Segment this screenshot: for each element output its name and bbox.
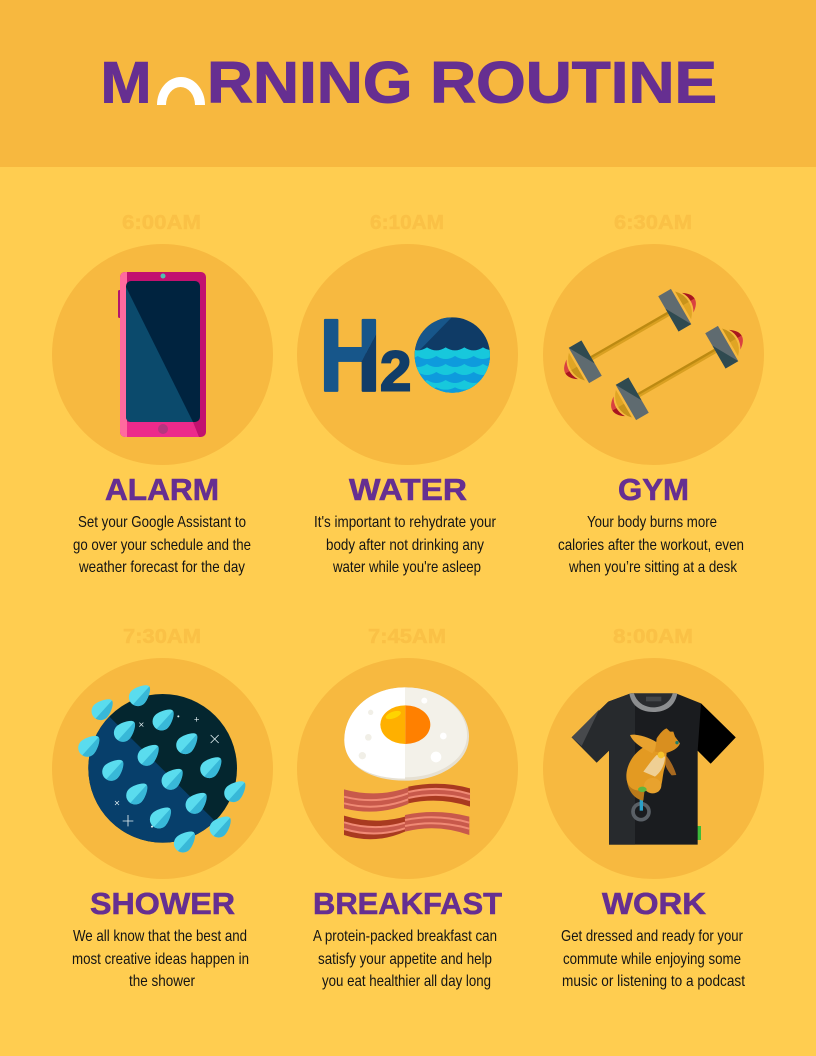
panel: gym: 6:30AM bbox=[614, 212, 692, 234]
heading: WORK bbox=[602, 887, 706, 921]
heading: WATER bbox=[349, 473, 467, 507]
description: music or listening to a podcast bbox=[562, 973, 745, 990]
panel: shower bbox=[52, 626, 273, 990]
icon: shower drops bbox=[78, 685, 246, 852]
title: RNING ROUTINE bbox=[207, 50, 717, 116]
panel: gym bbox=[543, 212, 764, 576]
fried egg bbox=[344, 687, 469, 781]
description: We all know that the best and bbox=[73, 928, 247, 945]
description: water while you're asleep bbox=[332, 559, 481, 576]
panel: alarm: 6:00AM bbox=[122, 212, 201, 234]
description: Your body burns more bbox=[587, 514, 717, 531]
description: go over your schedule and the bbox=[73, 537, 251, 554]
description: satisfy your appetite and help bbox=[318, 951, 492, 968]
description bbox=[314, 514, 497, 576]
description bbox=[561, 928, 745, 990]
description bbox=[558, 514, 744, 576]
bacon strip one bbox=[344, 784, 470, 812]
heading: SHOWER bbox=[90, 887, 235, 921]
description: commute while enjoying some bbox=[563, 951, 741, 968]
panel: water: 6:10AM bbox=[370, 212, 444, 234]
description bbox=[313, 928, 497, 990]
heading: BREAKFAST bbox=[313, 887, 502, 921]
panel: alarm bbox=[52, 212, 273, 576]
description: weather forecast for the day bbox=[78, 559, 245, 576]
icon: dumbbells bbox=[555, 281, 752, 428]
heading: ALARM bbox=[105, 473, 219, 507]
panel: breakfast bbox=[297, 626, 518, 990]
panel: work bbox=[543, 626, 764, 990]
header band bbox=[0, 0, 816, 167]
panel: shower: 7:30AM bbox=[123, 626, 201, 648]
description bbox=[72, 928, 249, 990]
icon: bear t-shirt bbox=[572, 693, 736, 845]
description: most creative ideas happen in bbox=[72, 951, 249, 968]
description bbox=[73, 514, 251, 576]
icon: H2O: 2 bbox=[380, 341, 411, 404]
description: A protein-packed breakfast can bbox=[313, 928, 497, 945]
panel: work: 8:00AM bbox=[613, 626, 693, 648]
title: M bbox=[100, 50, 152, 116]
bacon strip two bbox=[344, 812, 469, 839]
heading: GYM bbox=[618, 473, 689, 507]
description: when you’re sitting at a desk bbox=[568, 559, 738, 576]
panel: breakfast: 7:45AM bbox=[368, 626, 446, 648]
icon: H2O: H bbox=[319, 299, 381, 413]
icon: egg and bacon bbox=[344, 687, 470, 839]
icon: smartphone bbox=[118, 272, 206, 437]
dumbbell one bbox=[555, 281, 705, 391]
description: It's important to rehydrate your bbox=[314, 514, 497, 531]
description: the shower bbox=[129, 973, 196, 990]
panel: water bbox=[297, 212, 518, 576]
icon: H2O bbox=[319, 299, 511, 413]
description: Get dressed and ready for your bbox=[561, 928, 744, 945]
description: calories after the workout, even bbox=[558, 537, 744, 554]
description: Set your Google Assistant to bbox=[78, 514, 246, 531]
description: you eat healthier all day long bbox=[322, 973, 491, 990]
dumbbell two bbox=[602, 318, 752, 428]
bear on unicycle bbox=[626, 728, 680, 820]
description: body after not drinking any bbox=[326, 537, 484, 554]
bacon bbox=[344, 784, 470, 839]
